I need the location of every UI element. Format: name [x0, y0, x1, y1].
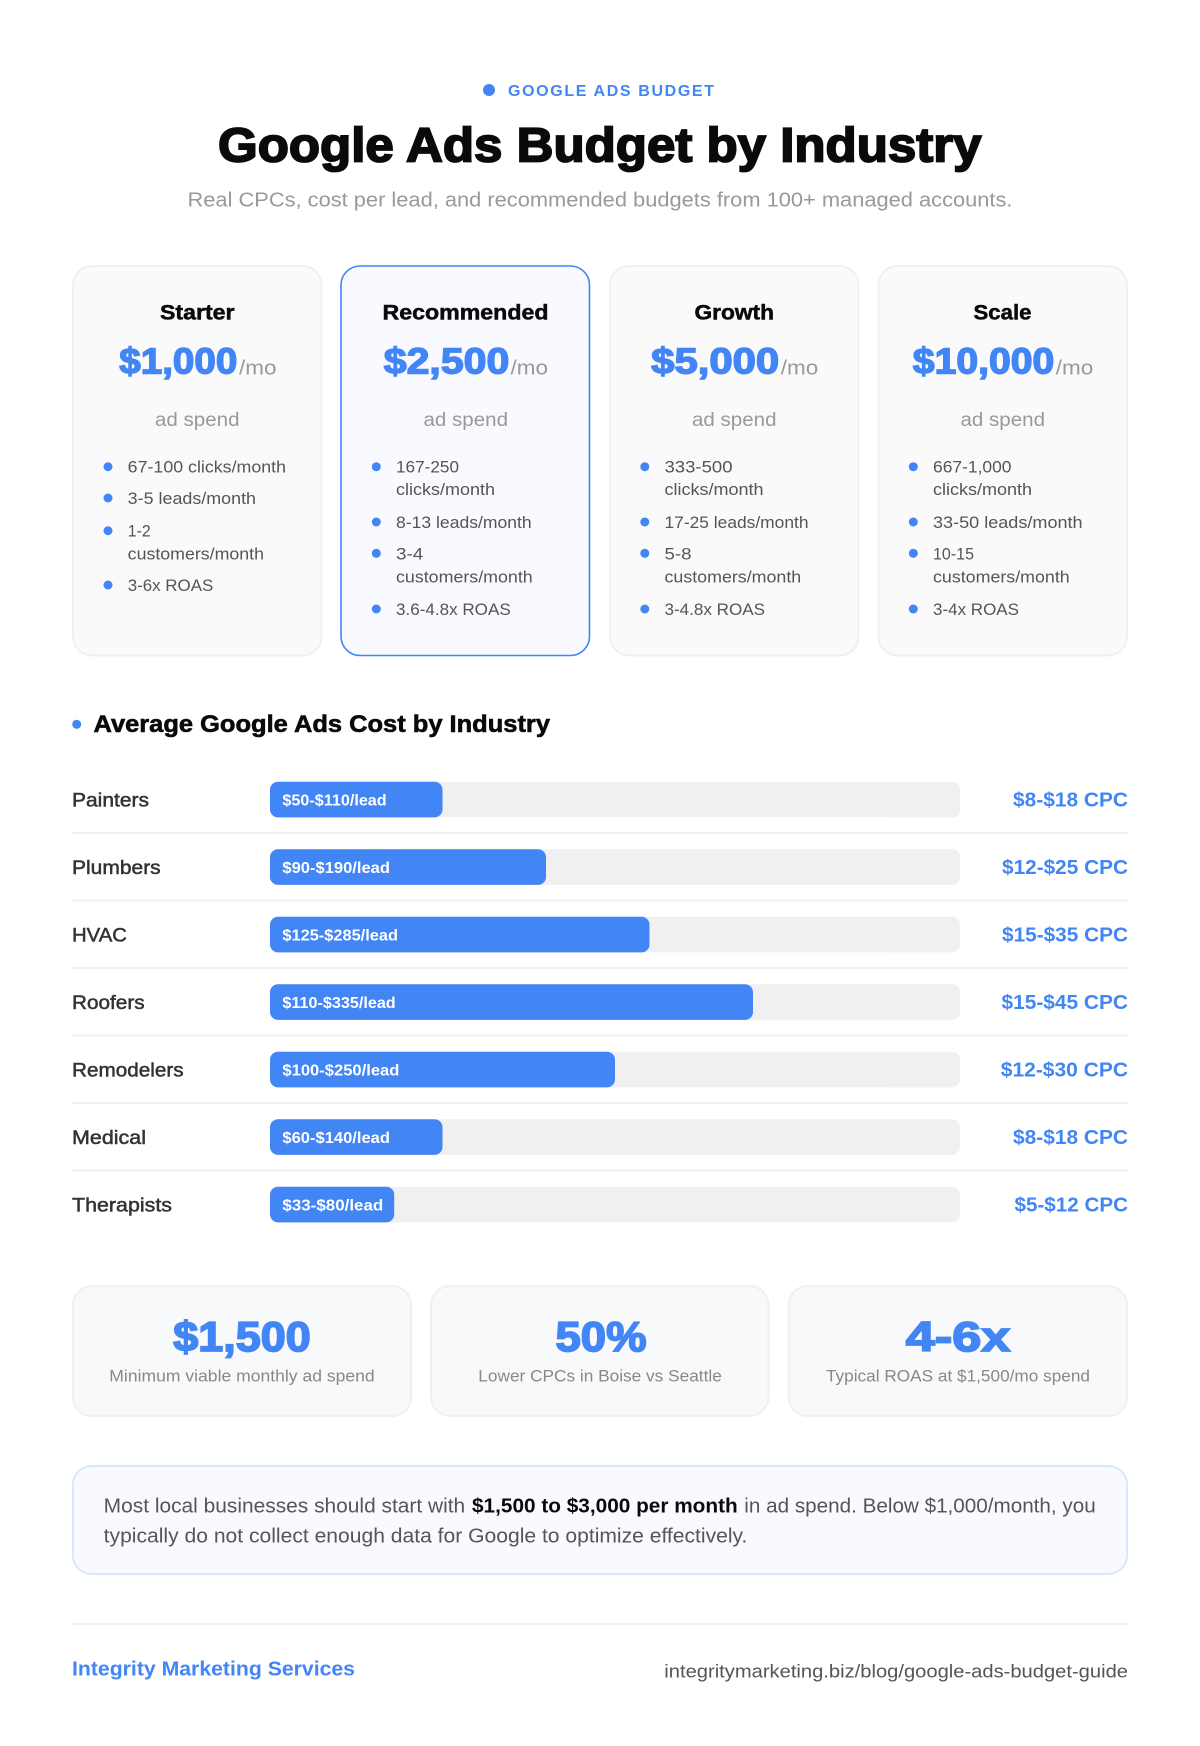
row: HVAC: $15-$35 CPC: [1002, 925, 1128, 947]
callout: recommendation: in ad spend. Below $1,000/month, you: [744, 1495, 1096, 1517]
row: Painters: $50-$110/lead: [282, 793, 387, 810]
callout: recommendation: [73, 1466, 1127, 1574]
ad spend label: ad spend: [692, 410, 776, 431]
price: [384, 340, 548, 381]
row: Plumbers: $90-$190/lead: [282, 860, 390, 877]
eyebrow label: GOOGLE ADS BUDGET: [508, 83, 714, 100]
footer brand: Integrity Marketing Services: [72, 1658, 355, 1680]
bullet list: 8-13 leads/month: [396, 513, 532, 532]
row: Remodelers: Remodelers: [72, 1060, 184, 1082]
row: Plumbers: $12-$25 CPC: [1002, 857, 1128, 879]
row: Medical: [72, 1119, 1128, 1155]
row: Medical: $8-$18 CPC: [1013, 1127, 1128, 1149]
plan name: Growth: [694, 301, 774, 324]
row: Painters: $8-$18 CPC: [1013, 790, 1128, 812]
bullet list: 67-100 clicks/month: [128, 458, 286, 477]
bullet list: 3-4x ROAS: [933, 600, 1019, 619]
bullet list: 667-1,000: [933, 458, 1012, 477]
row: HVAC: HVAC: [72, 925, 127, 947]
footer URL: integritymarketing.biz/blog/google-ads-budget-guide: [664, 1661, 1128, 1681]
price: $1,000: [119, 340, 237, 381]
stat card: lower CPCs: [431, 1286, 768, 1416]
row: Plumbers: [72, 849, 1128, 885]
row: Remodelers: [72, 1052, 1128, 1087]
bullet list: 3-4: [396, 544, 423, 563]
panel: Growth plan: [610, 266, 858, 656]
stat card: typical ROAS: [789, 1286, 1127, 1416]
price: $5,000: [651, 340, 779, 381]
plan name: Recommended: [382, 301, 548, 324]
ad spend label: ad spend: [960, 410, 1045, 431]
row: HVAC: $125-$285/lead: [282, 928, 398, 945]
panel: Starter plan: [73, 266, 322, 656]
title: Google Ads Budget by Industry: [218, 120, 982, 173]
row: Therapists: Therapists: [72, 1195, 172, 1217]
bullet list: 33-50 leads/month: [933, 513, 1083, 532]
callout: recommendation: Most local businesses should start with: [104, 1495, 465, 1517]
bullet list: [909, 458, 1083, 619]
bullet list: clicks/month: [396, 480, 495, 499]
row: Roofers: $110-$335/lead: [282, 995, 396, 1012]
panel: Recommended plan: [341, 266, 590, 656]
panel: Scale plan: [878, 266, 1127, 656]
stat card: typical ROAS: 4-6x: [906, 1313, 1011, 1360]
plan name: Starter: [160, 301, 234, 324]
price: /mo: [510, 358, 548, 380]
bullet list: 3-6x ROAS: [128, 576, 213, 595]
bullet list: 3-5 leads/month: [128, 489, 256, 508]
ad spend label: ad spend: [155, 410, 240, 431]
bullet list: customers/month: [664, 567, 801, 586]
stat card: lower CPCs: 50%: [556, 1313, 646, 1360]
bullet list: 3.6-4.8x ROAS: [396, 600, 511, 619]
row: Plumbers: Plumbers: [72, 857, 161, 879]
ad spend label: ad spend: [424, 410, 508, 431]
bar chart: cost per lead and CPC by industry: [72, 782, 1128, 1222]
stat card: minimum spend: [73, 1286, 411, 1416]
row: Painters: Painters: [72, 790, 149, 812]
price: /mo: [781, 358, 818, 380]
stat card: typical ROAS: Typical ROAS at $1,500/mo spend: [826, 1367, 1090, 1386]
stat card: minimum spend: Minimum viable monthly ad spend: [109, 1367, 375, 1386]
callout: recommendation: $1,500 to $3,000 per month: [472, 1495, 738, 1517]
row: Roofers: $15-$45 CPC: [1002, 992, 1128, 1014]
row: Remodelers: $100-$250/lead: [282, 1063, 399, 1080]
bullet list: customers/month: [396, 567, 533, 586]
price: /mo: [239, 358, 276, 380]
price: $2,500: [384, 340, 509, 381]
bullet list: [372, 458, 533, 619]
subtitle: Real CPCs, cost per lead, and recommended budgets from 100+ managed accounts.: [188, 190, 1012, 212]
bullet list: 10-15: [933, 544, 974, 563]
row: Medical: Medical: [72, 1127, 146, 1149]
row: HVAC: [72, 917, 1128, 952]
section heading: cost by industry: Average Google Ads Cost by Industry: [94, 711, 551, 738]
bullet list: 167-250: [396, 458, 459, 477]
bullet list: customers/month: [933, 567, 1070, 586]
row: Therapists: $5-$12 CPC: [1014, 1195, 1128, 1217]
bullet list: 3-4.8x ROAS: [664, 600, 765, 619]
bullet list: customers/month: [128, 544, 264, 563]
row: Medical: $60-$140/lead: [282, 1130, 390, 1147]
price: [651, 340, 818, 381]
price: /mo: [1056, 358, 1093, 380]
bullet list: [104, 458, 286, 595]
callout: recommendation: typically do not collect enough data for Google to optimize effectively.: [104, 1525, 747, 1547]
bullet list: clicks/month: [933, 480, 1032, 499]
bullet list: 5-8: [664, 544, 692, 563]
row: Therapists: $33-$80/lead: [282, 1198, 383, 1215]
bullet list: 1-2: [128, 522, 151, 541]
stat card: lower CPCs: Lower CPCs in Boise vs Seattle: [478, 1367, 722, 1386]
bullet list: 333-500: [664, 458, 732, 477]
row: Therapists: [72, 1187, 1128, 1222]
stat card: minimum spend: $1,500: [173, 1313, 311, 1360]
price: $10,000: [913, 340, 1054, 381]
bullet list: [640, 458, 808, 619]
row: Remodelers: $12-$30 CPC: [1001, 1060, 1128, 1082]
bullet list: clicks/month: [664, 480, 764, 499]
bullet list: 17-25 leads/month: [664, 513, 808, 532]
row: Painters: [72, 782, 1128, 817]
row: Roofers: [72, 984, 1128, 1020]
row: Roofers: Roofers: [72, 992, 145, 1014]
plan name: Scale: [974, 301, 1032, 324]
